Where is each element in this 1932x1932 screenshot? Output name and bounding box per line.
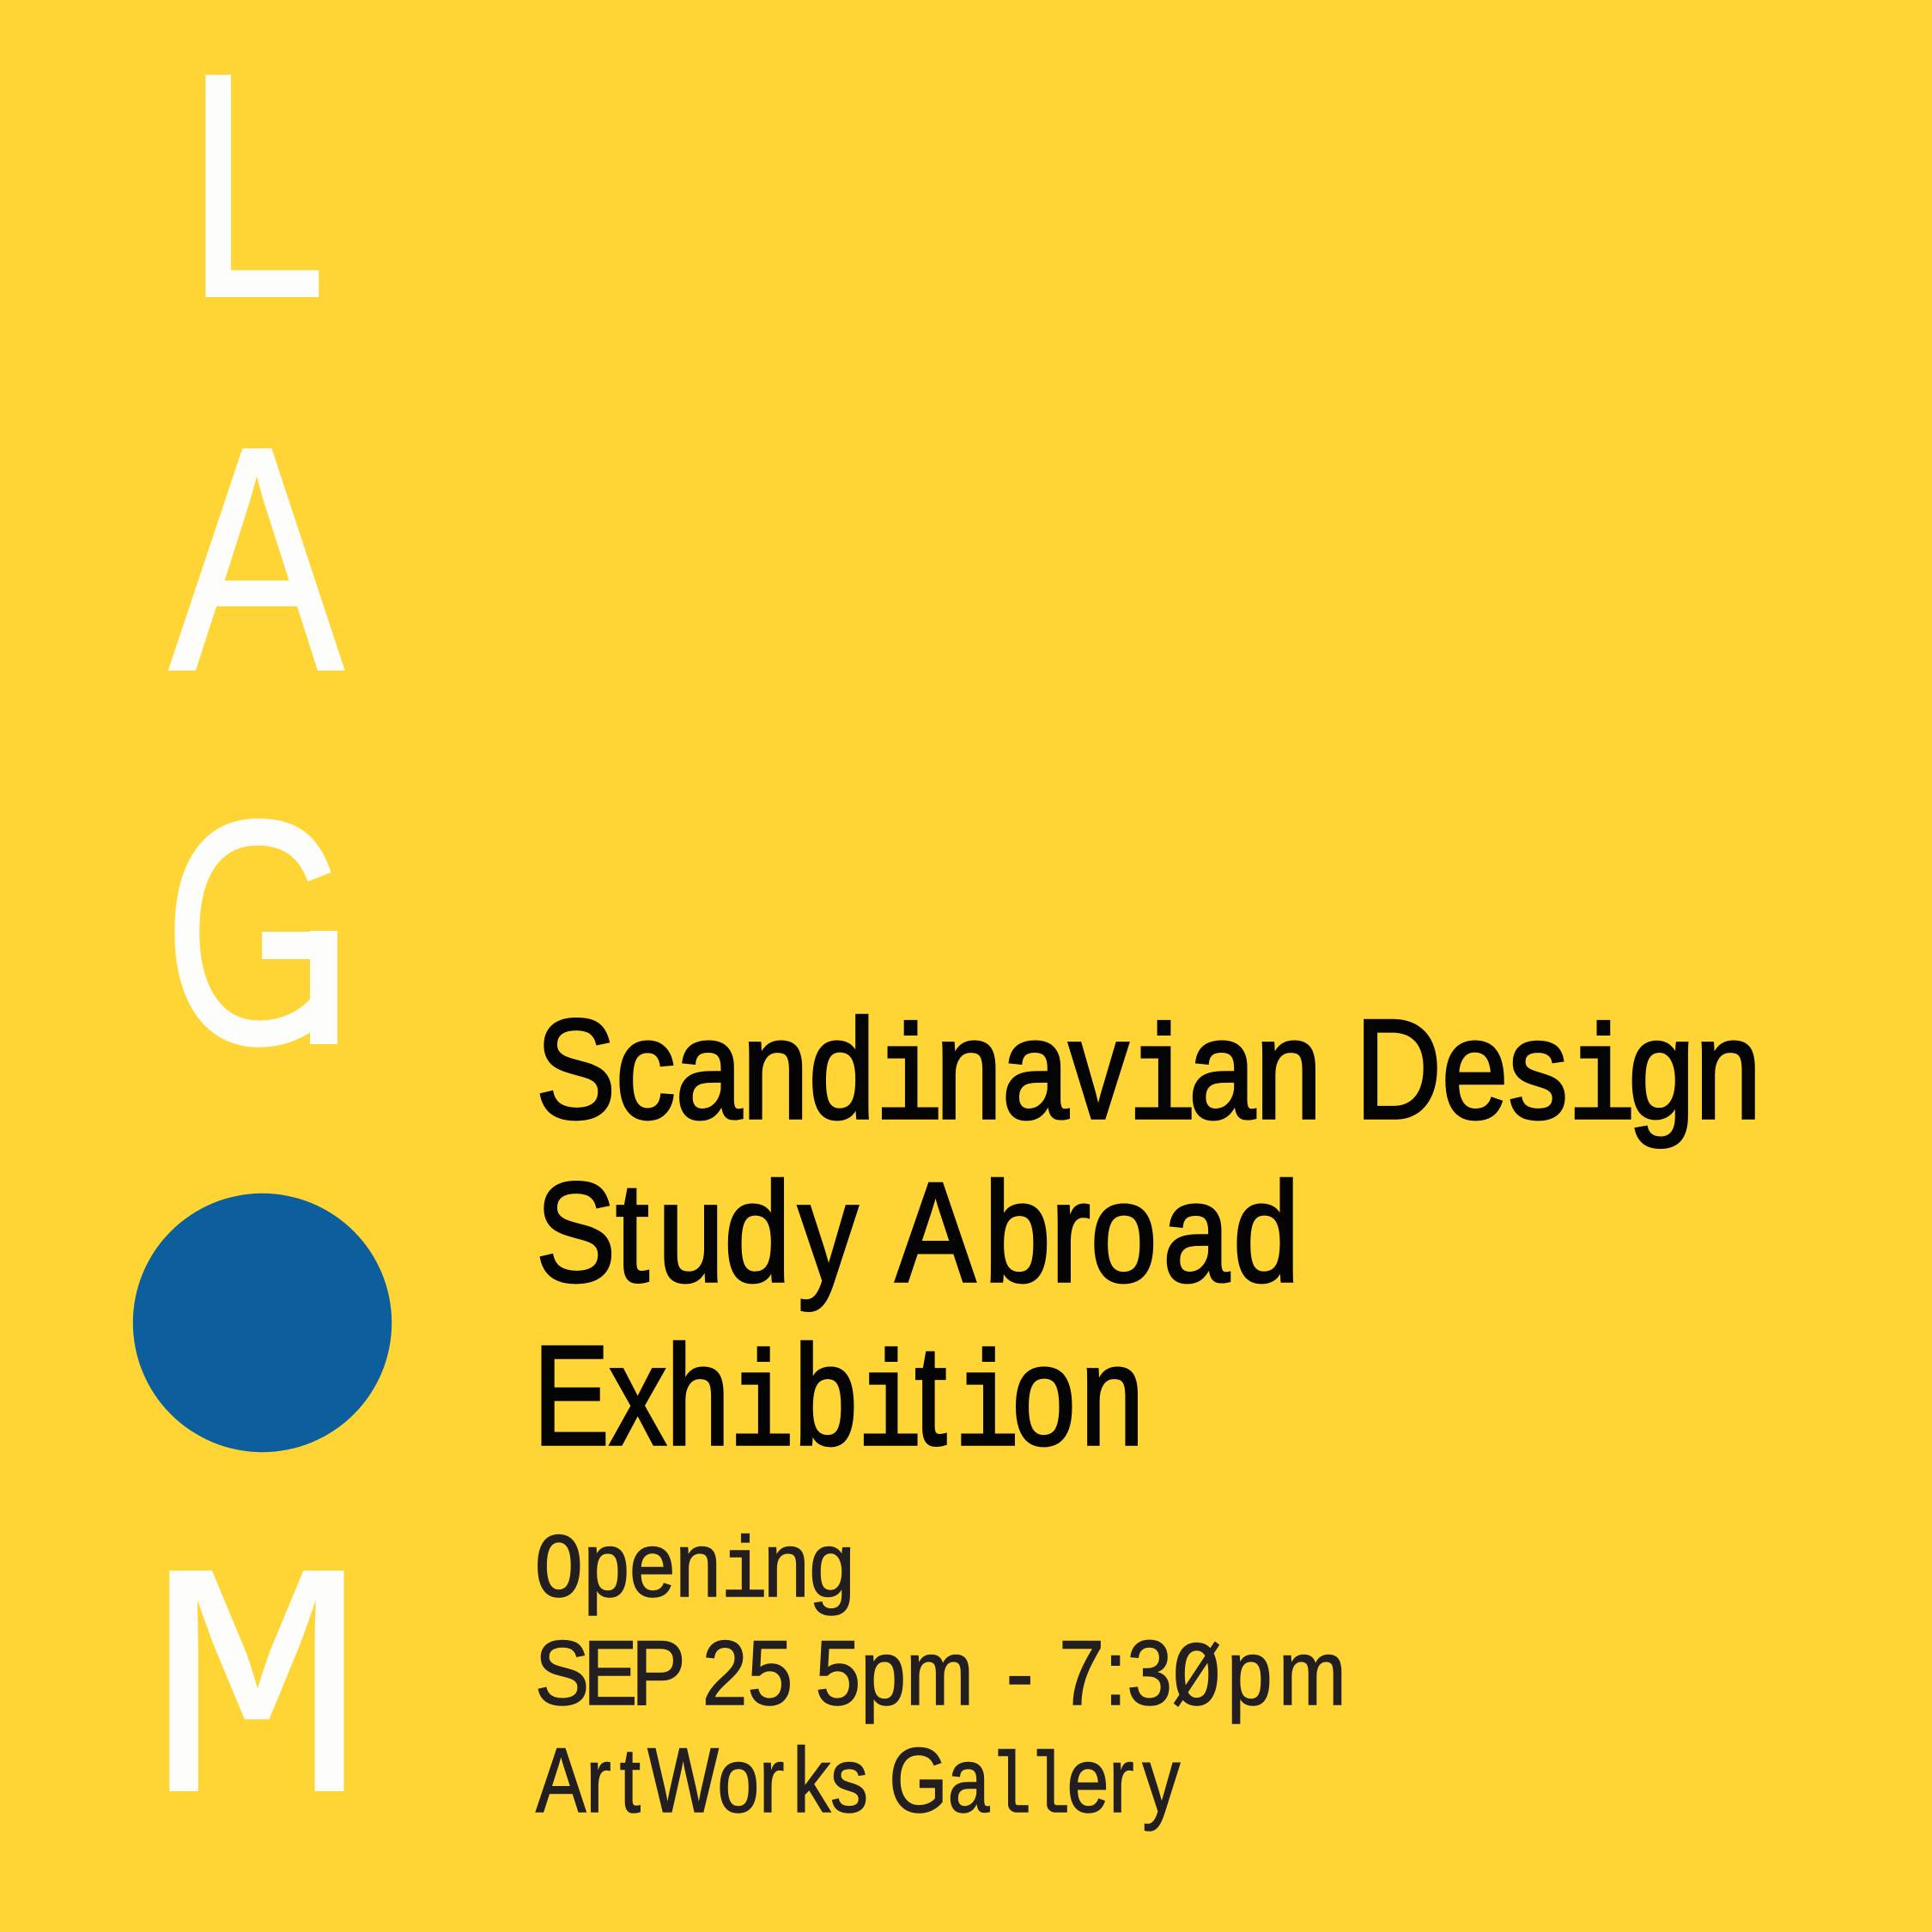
letter A: A [169, 381, 345, 738]
event details text block: ArtWorks Gallery [536, 1728, 1180, 1838]
letter L: L [185, 8, 326, 364]
heading: exhibition title: Exhibition [533, 1315, 1144, 1485]
event details text block: Opening [534, 1513, 855, 1625]
heading: exhibition title: Scandinavian Design [536, 991, 1761, 1159]
vertical wordmark: LAGOM [133, 8, 392, 1893]
blue circle standing in for letter O [133, 1194, 392, 1452]
event details text block: SEP 25 5pm - 7:3Øpm [535, 1622, 1346, 1733]
heading: exhibition title [533, 991, 1761, 1485]
heading: exhibition title: Study Abroad [536, 1154, 1300, 1312]
letter G: G [163, 753, 351, 1110]
event details text block [534, 1513, 1346, 1838]
letter M: M [146, 1514, 368, 1893]
